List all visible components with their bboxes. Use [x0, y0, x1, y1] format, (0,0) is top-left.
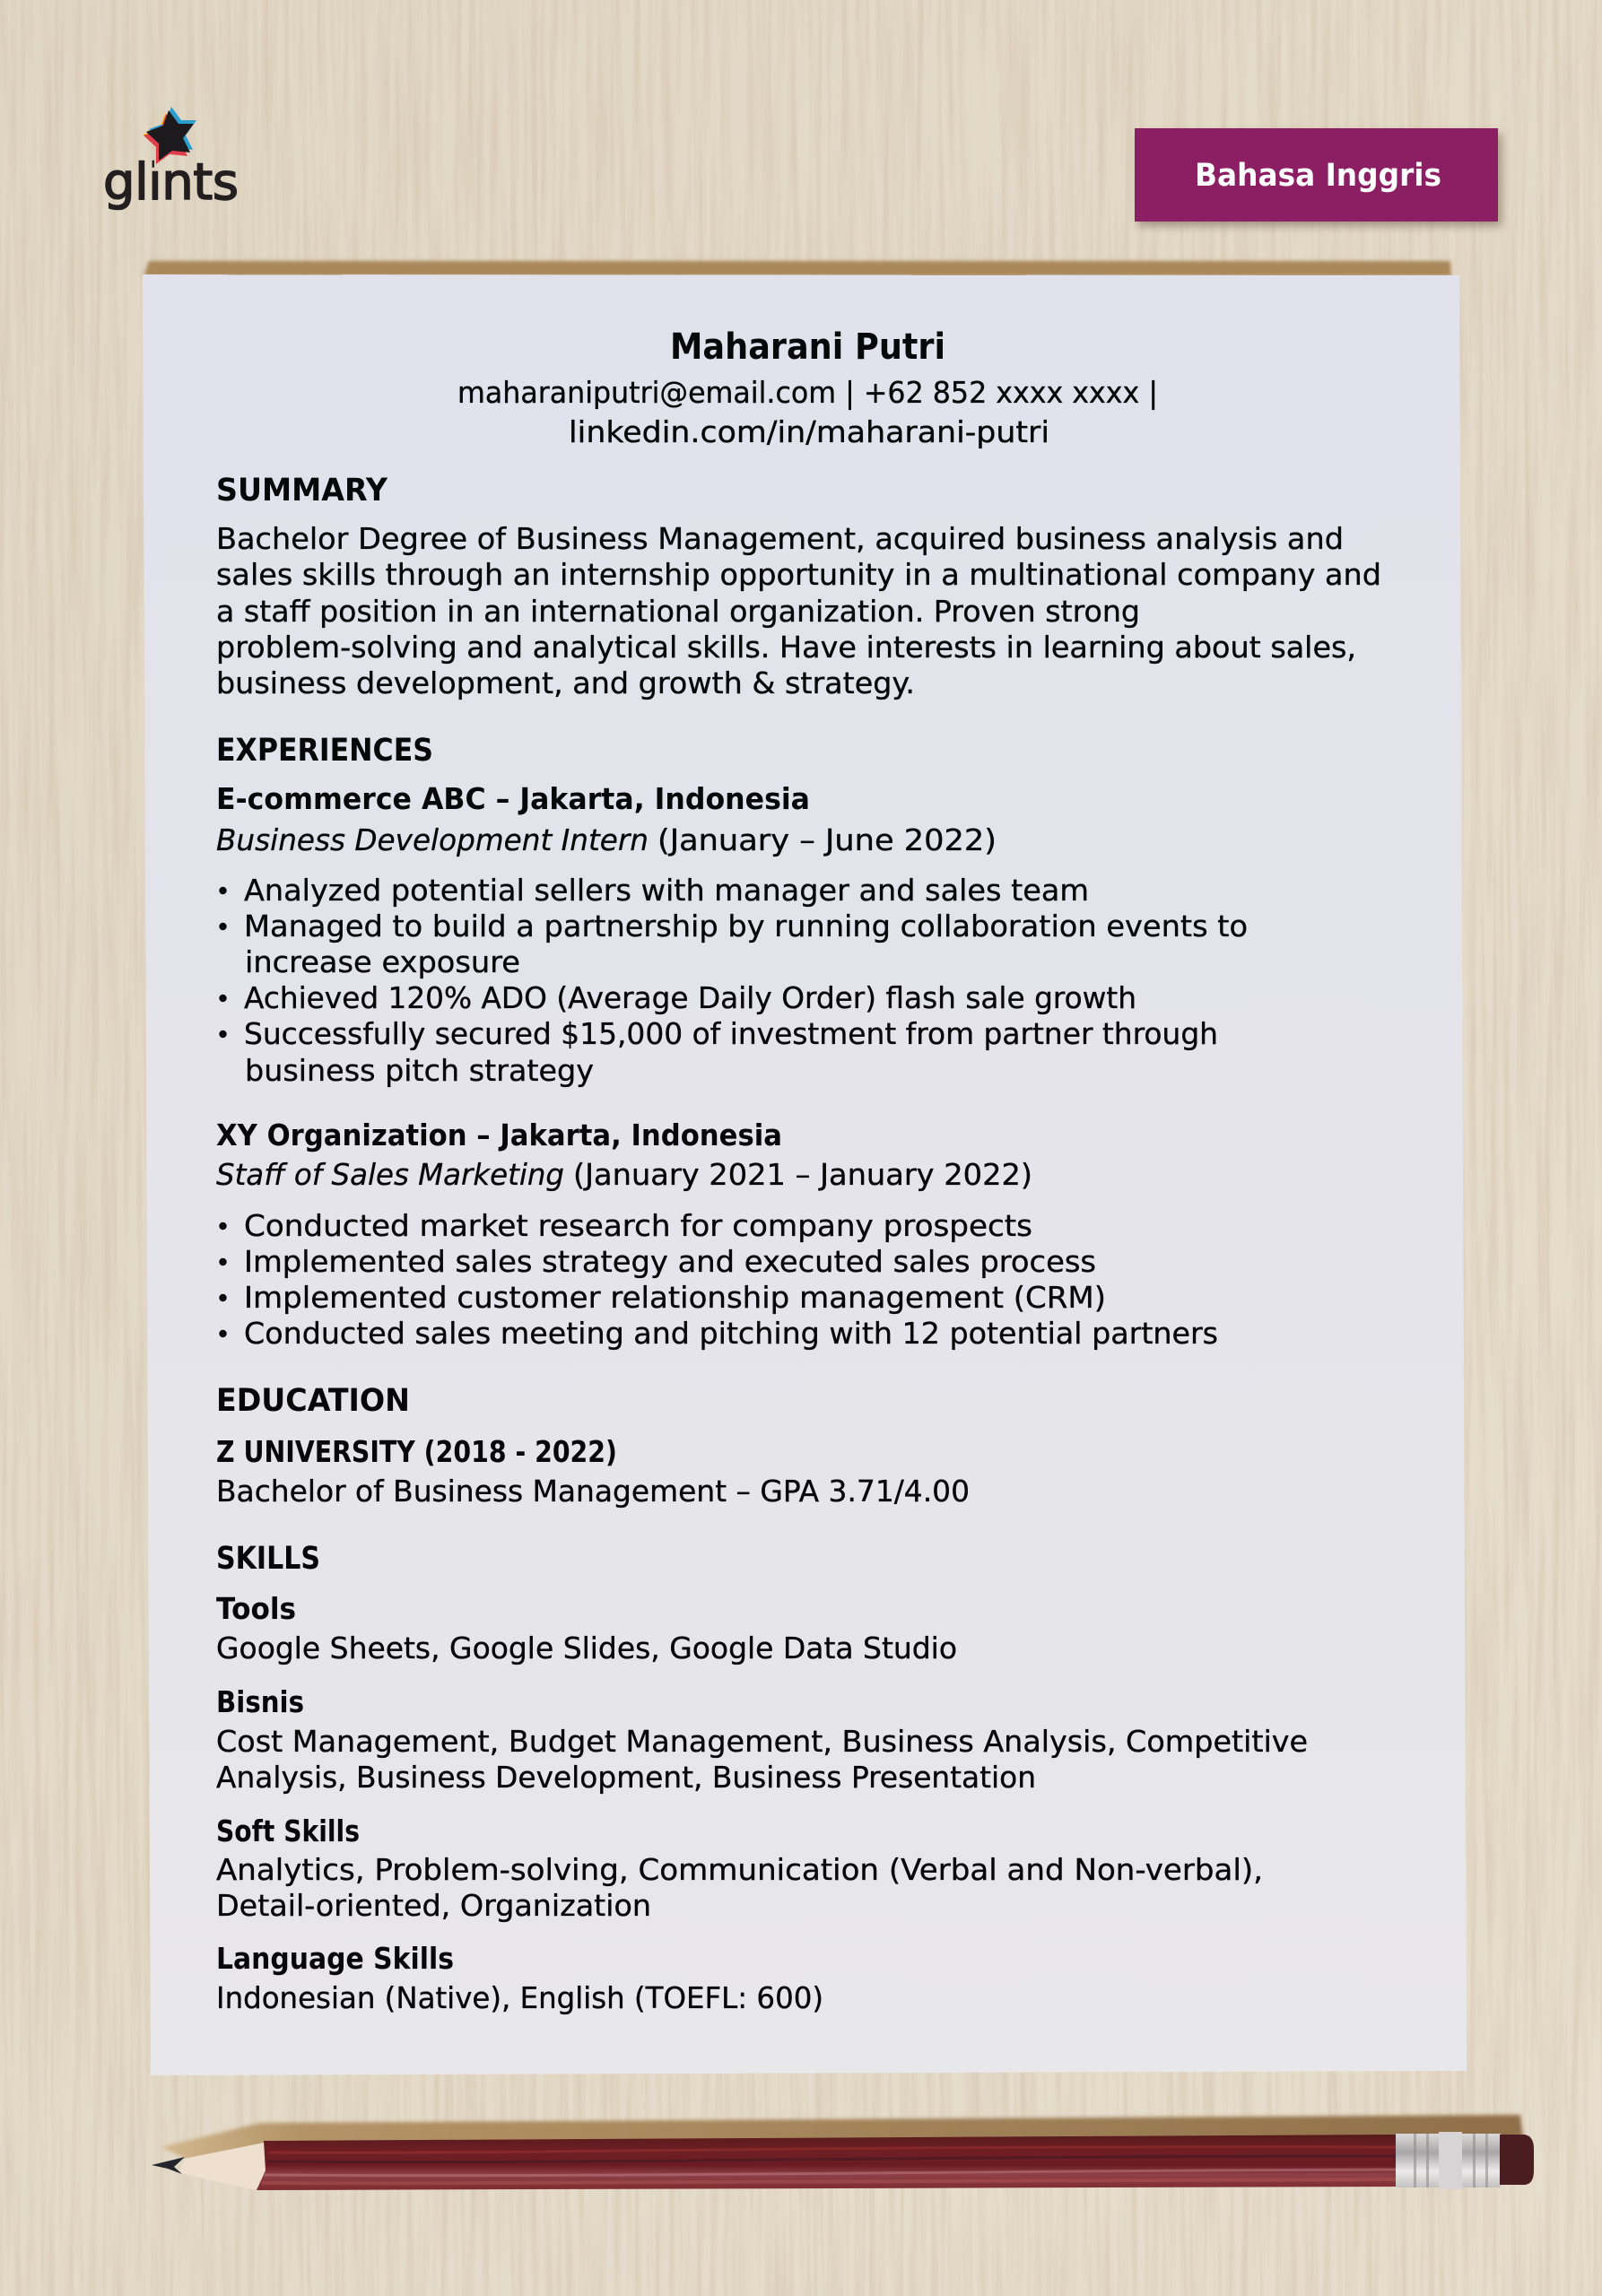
- resume paper: [143, 274, 1467, 2075]
- skills: tools: [216, 1591, 957, 1665]
- experience: XY organization: Conducted sales meeting and pitching with 12 potential partners: [244, 1316, 1218, 1351]
- experience: XY organization: Conducted market research for company prospects: [244, 1208, 1032, 1243]
- skills: bisnis: Cost Management, Budget Management, Business Analysis, Competitive: [216, 1724, 1308, 1759]
- skills: soft skills: Analytics, Problem-solving, Communication (Verbal and Non-verbal),: [216, 1852, 1263, 1887]
- contact details: linkedin.com/in/maharani-putri: [569, 414, 1049, 449]
- experience: XY organization: (January 2021 – January 2022): [573, 1157, 1032, 1192]
- experience: e-commerce ABC: business pitch strategy: [245, 1053, 594, 1088]
- pencil lead: [152, 2157, 185, 2174]
- badge: Bahasa Inggris: [1135, 128, 1502, 226]
- experience: e-commerce ABC: E-commerce ABC – Jakarta, Indonesia: [216, 781, 810, 816]
- experience: e-commerce ABC: increase exposure: [245, 944, 520, 979]
- skills: soft skills: Detail-oriented, Organization: [216, 1888, 651, 1923]
- skills: language skills: [216, 1941, 823, 2015]
- pencil body: [257, 2135, 1396, 2190]
- pencil ferrule: [1396, 2132, 1501, 2189]
- summary text: [216, 521, 1381, 700]
- logo wordmark: glints: [103, 153, 239, 212]
- icon: star: [143, 107, 196, 164]
- experience: e-commerce ABC: Analyzed potential sellers with manager and sales team: [244, 873, 1089, 908]
- skills: language skills: Language Skills: [216, 1941, 454, 1976]
- summary text: Bachelor Degree of Business Management, acquired business analysis and: [216, 521, 1344, 556]
- skills: language skills: Indonesian (Native), English (TOEFL: 600): [216, 1980, 823, 2015]
- skills: soft skills: Soft Skills: [216, 1813, 360, 1848]
- pencil: [152, 2115, 1534, 2190]
- heading: skills: SKILLS: [216, 1541, 320, 1577]
- summary text: a staff position in an international organization. Proven strong: [216, 594, 1140, 629]
- skills: bisnis: [216, 1684, 1308, 1795]
- experience: XY organization: Staff of Sales Marketing: [216, 1157, 564, 1192]
- heading: education: EDUCATION: [216, 1383, 410, 1419]
- skills: tools: Google Sheets, Google Slides, Google Data Studio: [216, 1631, 957, 1665]
- experience: XY organization: XY Organization – Jakarta, Indonesia: [216, 1118, 782, 1152]
- heading: experiences: EXPERIENCES: [216, 733, 433, 769]
- experience: e-commerce ABC: (January – June 2022): [657, 822, 997, 857]
- experience: e-commerce ABC: Managed to build a partnership by running collaboration events to: [244, 909, 1248, 944]
- experience: e-commerce ABC: [216, 781, 1248, 1088]
- heading: summary: SUMMARY: [216, 473, 388, 509]
- experience: XY organization: [216, 1118, 1218, 1351]
- paper top shadow: [144, 261, 1451, 276]
- experience: XY organization: Implemented customer relationship management (CRM): [244, 1280, 1106, 1315]
- pencil eraser: [1500, 2135, 1534, 2185]
- education entry: Bachelor of Business Management – GPA 3.71/4.00: [216, 1474, 970, 1509]
- skills: bisnis: Bisnis: [216, 1684, 304, 1719]
- experience: XY organization: Implemented sales strategy and executed sales process: [244, 1244, 1096, 1279]
- experience: e-commerce ABC: Business Development Intern: [216, 822, 649, 857]
- pencil shadow: [161, 2115, 1523, 2160]
- logo: glints: [103, 107, 239, 212]
- summary text: business development, and growth & strategy.: [216, 665, 915, 700]
- education entry: [216, 1434, 970, 1509]
- skills: bisnis: Analysis, Business Development, Business Presentation: [216, 1760, 1036, 1795]
- summary text: problem-solving and analytical skills. Have interests in learning about sales,: [216, 630, 1356, 665]
- education entry: Z UNIVERSITY (2018 - 2022): [216, 1434, 617, 1469]
- pencil wood cone: [179, 2143, 266, 2190]
- experience: e-commerce ABC: Achieved 120% ADO (Average Daily Order) flash sale growth: [244, 980, 1136, 1015]
- experience: e-commerce ABC: Successfully secured $15,000 of investment from partner through: [244, 1016, 1218, 1051]
- badge: Bahasa Inggris: Bahasa Inggris: [1195, 158, 1441, 194]
- skills: tools: Tools: [216, 1591, 296, 1626]
- contact details: [457, 375, 1158, 449]
- skills: soft skills: [216, 1813, 1263, 1923]
- summary text: sales skills through an internship opportunity in a multinational company and: [216, 557, 1381, 592]
- contact details: maharaniputri@email.com | +62 852 xxxx xxxx |: [457, 375, 1158, 410]
- name: Maharani Putri: [670, 326, 945, 368]
